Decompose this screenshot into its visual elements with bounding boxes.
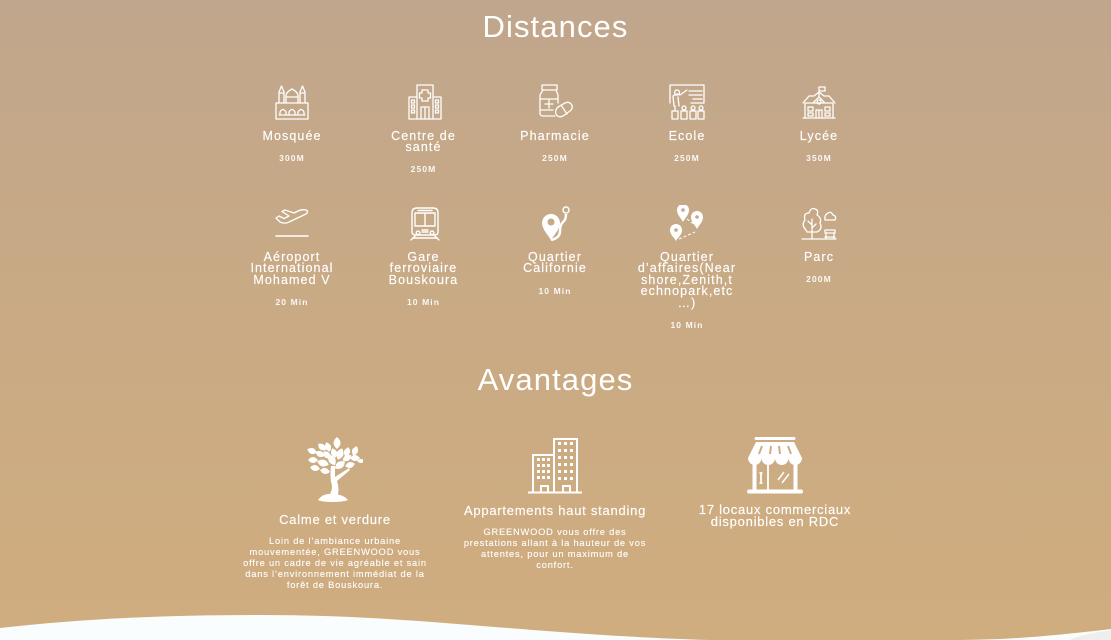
item: Parc bbox=[801, 208, 837, 284]
label bbox=[523, 250, 587, 275]
label: santé bbox=[405, 140, 442, 154]
label: Parc bbox=[804, 250, 834, 264]
icon: train bbox=[410, 207, 440, 241]
advantage: 17 locaux commerciaux bbox=[699, 437, 851, 529]
item: Lycée bbox=[800, 86, 838, 163]
text block: offre un cadre de vie agréable et sain bbox=[243, 558, 427, 568]
distance: 250M bbox=[411, 164, 436, 174]
heading: 17 locaux commerciaux bbox=[699, 502, 851, 517]
text block: attentes, pour un maximum de bbox=[481, 549, 629, 559]
advantage: Calme et verdure bbox=[243, 437, 427, 590]
text block: GREENWOOD vous offre des bbox=[483, 527, 627, 537]
label: Quartier bbox=[660, 250, 714, 264]
item: Pharmacie bbox=[520, 84, 590, 163]
label: d’affaires(Near bbox=[638, 261, 736, 275]
distance: 10 Min bbox=[670, 320, 704, 330]
label: Gare bbox=[407, 250, 440, 264]
title: Avantages: Avantages bbox=[478, 362, 633, 397]
text block: forêt de Bouskoura. bbox=[287, 580, 383, 590]
distance: 10 Min bbox=[407, 297, 440, 307]
label: …) bbox=[678, 296, 696, 310]
label bbox=[391, 128, 456, 154]
text block bbox=[243, 536, 427, 590]
item: Quartier d'affaires bbox=[638, 205, 736, 330]
title: Distances: Distances bbox=[482, 9, 628, 44]
item: Mosquée bbox=[262, 85, 322, 163]
item: Ecole bbox=[669, 84, 705, 163]
label: International bbox=[250, 261, 334, 275]
label: shore,Zenith,t bbox=[641, 272, 733, 286]
item: Aéroport International Mohamed V bbox=[250, 209, 334, 307]
item: Gare ferroviaire Bouskoura bbox=[389, 207, 458, 307]
label: Pharmacie bbox=[520, 128, 590, 142]
distance: 350M bbox=[806, 153, 832, 163]
text block: Loin de l’ambiance urbaine bbox=[269, 536, 401, 546]
icon: three map pins bbox=[670, 205, 703, 241]
icon: medicine bottle bbox=[539, 84, 573, 118]
icon: school building bbox=[802, 86, 836, 119]
label: Aéroport bbox=[264, 250, 320, 264]
text block: confort. bbox=[536, 560, 574, 570]
label: Californie bbox=[523, 261, 587, 275]
label: Mosquée bbox=[262, 128, 322, 142]
item: Quartier Californie bbox=[523, 206, 587, 296]
text block: dans l’environnement immédiat de la bbox=[245, 569, 425, 579]
icon: plane taking off bbox=[275, 209, 309, 237]
icon: classroom bbox=[669, 84, 705, 120]
label: Lycée bbox=[800, 128, 838, 142]
icon: mosque bbox=[275, 85, 309, 120]
text block: prestations allant à la hauteur de vos bbox=[464, 538, 646, 548]
distance: 250M bbox=[542, 153, 568, 163]
label: Bouskoura bbox=[389, 272, 458, 286]
distance: 200M bbox=[806, 274, 832, 284]
heading: Calme et verdure bbox=[279, 512, 391, 526]
icon: tree bbox=[307, 437, 363, 502]
icon: hospital bbox=[408, 84, 442, 120]
label bbox=[638, 250, 736, 310]
advantage: Appartements haut standing bbox=[464, 438, 646, 570]
label: Quartier bbox=[528, 250, 582, 264]
icon: shop front bbox=[747, 437, 803, 494]
wave footer bbox=[0, 615, 1111, 640]
text block bbox=[464, 527, 646, 570]
label bbox=[250, 250, 334, 286]
label: echnopark,etc bbox=[641, 284, 733, 298]
heading: Appartements haut standing bbox=[464, 502, 646, 518]
heading: disponibles en RDC bbox=[711, 514, 839, 528]
label: Ecole bbox=[669, 128, 705, 142]
icon: apartment buildings bbox=[528, 438, 582, 494]
label: ferroviaire bbox=[390, 261, 457, 275]
label: Mohamed V bbox=[253, 272, 331, 286]
distance: 250M bbox=[674, 153, 700, 163]
distance: 300M bbox=[279, 153, 305, 163]
distance: 10 Min bbox=[538, 286, 572, 296]
icon: route pin bbox=[542, 206, 570, 241]
item: Centre de santé bbox=[391, 84, 456, 174]
icon: park bbox=[801, 208, 837, 240]
distance: 20 Min bbox=[275, 297, 309, 307]
text block: mouvementée, GREENWOOD vous bbox=[250, 547, 420, 557]
heading bbox=[699, 502, 851, 529]
label bbox=[389, 250, 458, 286]
label: Centre de bbox=[391, 128, 456, 142]
